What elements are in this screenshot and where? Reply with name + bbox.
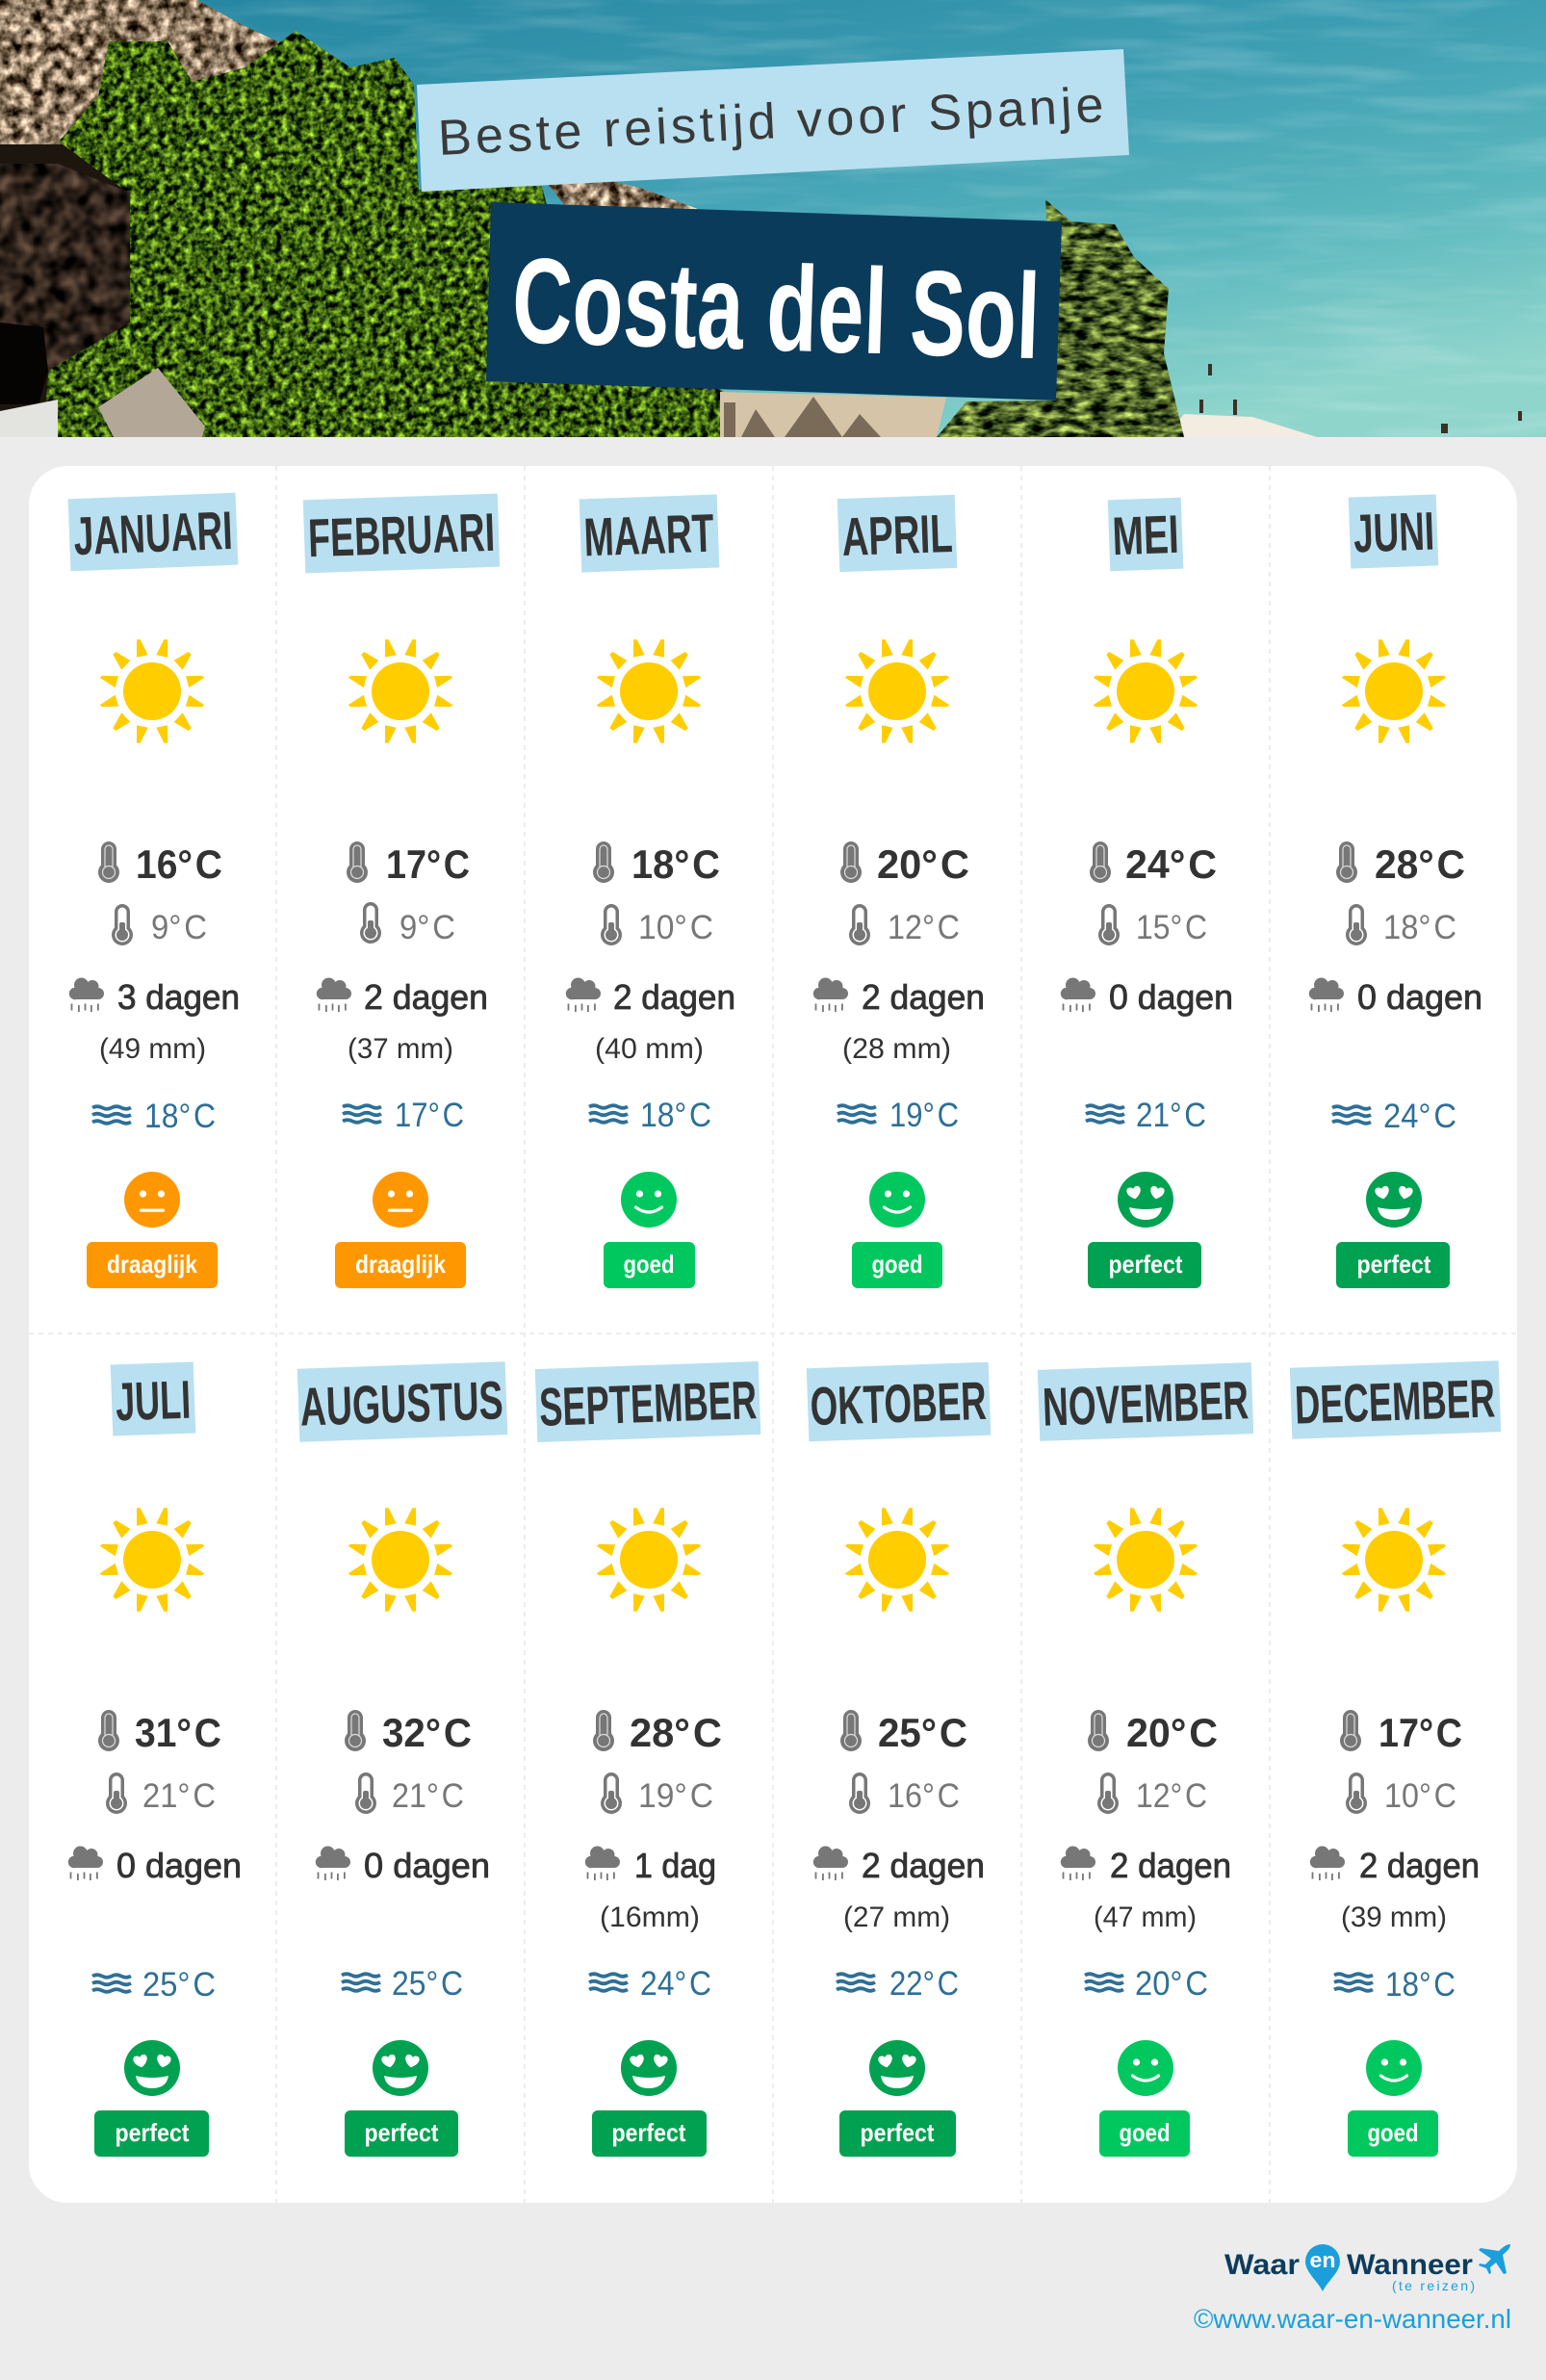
month label: FEBRUARI (307, 502, 496, 568)
panel: months table (29, 466, 1517, 2203)
logo: Waar en Wanneer: Wanneer (1347, 2249, 1473, 2281)
low temperature: 10°C (1384, 1777, 1456, 1815)
column: januari (68, 493, 240, 1288)
sea temperature (92, 1098, 216, 1135)
rating badge (94, 2110, 209, 2157)
sea temperature (1086, 1097, 1206, 1134)
month label: AUGUSTUS (299, 1369, 504, 1437)
rainfall: (40 mm) (595, 1033, 704, 1065)
high temperature: 32°C (382, 1710, 472, 1755)
low temperature (601, 1772, 713, 1815)
high temperature (98, 841, 222, 887)
month label (807, 1362, 991, 1441)
sea temperature: 24°C (640, 1965, 711, 2003)
month label: APRIL (840, 503, 954, 567)
low temperature (601, 904, 713, 946)
month label (297, 1361, 507, 1442)
rainfall: (28 mm) (842, 1033, 951, 1065)
icon: in-love face (124, 2040, 180, 2096)
logo: Waar en Wanneer (1224, 2244, 1510, 2293)
low temperature: 10°C (638, 909, 713, 946)
logo: Waar en Wanneer: (te reizen) (1392, 2278, 1475, 2293)
logo: Waar en Wanneer: Waar (1224, 2249, 1300, 2281)
high temperature (1336, 841, 1465, 887)
sea temperature: 19°C (889, 1097, 959, 1134)
rating badge (1088, 1242, 1201, 1288)
rainfall: (27 mm) (843, 1901, 950, 1933)
month label: NOVEMBER (1042, 1369, 1250, 1437)
sea temperature: 25°C (392, 1965, 463, 2003)
icon: sun (100, 1508, 204, 1612)
month label (580, 495, 719, 572)
month label (1349, 494, 1438, 569)
column: oktober (807, 1362, 991, 2157)
high temperature: 31°C (135, 1710, 221, 1755)
rainfall: (47 mm) (1094, 1901, 1197, 1933)
low temperature: 15°C (1136, 909, 1207, 946)
sea temperature (92, 1966, 216, 2004)
sea temperature: 17°C (395, 1097, 464, 1134)
rating badge (1336, 1242, 1450, 1288)
icon: sun (1094, 639, 1198, 743)
rating badge: goed (872, 1250, 922, 1279)
low temperature (849, 1772, 960, 1815)
icon: happy face (621, 1172, 677, 1228)
high temperature (98, 1710, 221, 1755)
month label (1108, 498, 1183, 571)
month label: SEPTEMBER (538, 1369, 758, 1437)
month label (68, 493, 238, 571)
rating badge: draaglijk (355, 1250, 446, 1279)
rating badge: perfect (1109, 1250, 1183, 1279)
high temperature (840, 1710, 967, 1755)
rating badge: goed (1119, 2118, 1171, 2147)
high temperature: 18°C (631, 841, 720, 887)
icon: happy face (1118, 2040, 1173, 2096)
low temperature: 12°C (888, 909, 960, 946)
sea temperature (1334, 1966, 1456, 2004)
sea temperature (589, 1965, 711, 2003)
column: december (1290, 1360, 1501, 2157)
column: februari (303, 494, 500, 1288)
icon: in-love face (621, 2040, 677, 2096)
column: april (813, 495, 985, 1288)
icon: sun (1342, 639, 1446, 743)
icon: neutral face (124, 1172, 180, 1228)
icon: sun (845, 1508, 949, 1612)
low temperature (1346, 904, 1456, 946)
rain days: 0 dagen (116, 1846, 242, 1885)
month label: JUNI (1353, 501, 1435, 563)
rain days: 2 dagen (1359, 1846, 1480, 1885)
rating badge (839, 2110, 956, 2157)
column: juni (1309, 494, 1482, 1288)
high temperature: 25°C (878, 1710, 967, 1755)
rainfall: (49 mm) (99, 1033, 206, 1065)
rating badge: perfect (1357, 1250, 1431, 1279)
low temperature (1346, 1772, 1456, 1815)
low temperature (112, 904, 207, 946)
high temperature: 20°C (877, 841, 969, 887)
sea temperature (343, 1097, 464, 1134)
sea temperature: 21°C (1136, 1097, 1206, 1134)
high temperature: 16°C (136, 841, 222, 887)
icon: airplane (1479, 2244, 1510, 2274)
rating badge: draaglijk (107, 1250, 197, 1279)
rainfall: (16mm) (600, 1901, 700, 1933)
low temperature: 9°C (399, 909, 455, 946)
low temperature: 18°C (1383, 909, 1456, 946)
icon: sun (100, 639, 204, 743)
rating badge: perfect (116, 2118, 190, 2147)
sea temperature: 20°C (1135, 1965, 1208, 2003)
sea temperature: 18°C (1385, 1966, 1456, 2004)
rating badge (1099, 2110, 1190, 2157)
rating badge: perfect (364, 2118, 439, 2147)
icon: sun (1342, 1508, 1446, 1612)
high temperature (345, 1710, 472, 1755)
month label: OKTOBER (810, 1370, 988, 1436)
month label (111, 1362, 195, 1436)
month label (303, 494, 500, 573)
high temperature (1340, 1710, 1462, 1755)
month label: MAART (582, 503, 715, 567)
low temperature: 12°C (1136, 1777, 1207, 1815)
high temperature: 17°C (386, 841, 470, 887)
sea temperature: 18°C (640, 1097, 711, 1134)
sea temperature: 25°C (142, 1966, 216, 2004)
month label: MEI (1111, 504, 1180, 566)
low temperature (849, 904, 960, 946)
month label (1038, 1362, 1253, 1441)
rating badge: goed (624, 1250, 674, 1279)
high temperature: 28°C (1375, 841, 1465, 887)
rain days (1310, 1846, 1480, 1885)
rating badge: perfect (612, 2118, 686, 2147)
rating badge (87, 1242, 218, 1288)
low temperature: 16°C (888, 1777, 960, 1815)
sea temperature (1332, 1098, 1456, 1135)
rain days: 3 dagen (117, 977, 240, 1017)
low temperature: 21°C (392, 1777, 464, 1815)
high temperature (593, 841, 720, 887)
icon: sun (597, 639, 701, 743)
high temperature (347, 841, 470, 887)
icon: in-love face (869, 2040, 925, 2096)
rain days: 2 dagen (1110, 1846, 1231, 1885)
rating badge: perfect (861, 2118, 935, 2147)
column: september (535, 1361, 760, 2157)
rainfall: (37 mm) (348, 1033, 453, 1065)
icon: sun (597, 1508, 701, 1612)
column: juli (68, 1362, 242, 2157)
month label: JULI (115, 1369, 192, 1432)
column: augustus (297, 1361, 507, 2157)
rain days: 2 dagen (364, 977, 488, 1017)
sea temperature (1085, 1965, 1208, 2003)
icon: map pin: en (1309, 2248, 1336, 2272)
rainfall: (39 mm) (1341, 1901, 1447, 1933)
high temperature: 24°C (1125, 841, 1217, 887)
column: mei (1061, 498, 1233, 1288)
month label: JANUARI (72, 500, 234, 566)
icon: map pin (1305, 2244, 1340, 2291)
icon: neutral face (373, 1172, 428, 1228)
icon: sun (845, 639, 949, 743)
header photo: coastline with sea, cliffs, foliage and beach (0, 0, 1546, 437)
sea temperature: 18°C (144, 1098, 216, 1135)
low temperature (106, 1772, 216, 1815)
rating badge (852, 1242, 942, 1288)
icon: in-love face (1118, 1172, 1173, 1228)
website url: ©www.waar-en-wanneer.nl (1194, 2304, 1511, 2334)
column: november (1038, 1362, 1253, 2157)
rain days (585, 1846, 716, 1885)
high temperature: 17°C (1379, 1710, 1462, 1755)
month label (535, 1361, 760, 1442)
icon: sun (348, 639, 452, 743)
rating badge: goed (1367, 2118, 1419, 2147)
rain days: 0 dagen (1109, 977, 1233, 1017)
rating badge (592, 2110, 707, 2157)
rain days: 2 dagen (862, 977, 985, 1017)
high temperature: 20°C (1126, 1710, 1218, 1755)
icon: in-love face (373, 2040, 428, 2096)
rain days: 2 dagen (613, 977, 735, 1017)
sea temperature (342, 1965, 463, 2003)
rain days: 0 dagen (1357, 977, 1482, 1017)
low temperature: 21°C (142, 1777, 216, 1815)
subtitle banner: Beste reistijd voor Spanje (437, 77, 1105, 167)
rain days: 0 dagen (364, 1846, 490, 1885)
sea temperature (837, 1965, 959, 2003)
month label (837, 495, 957, 572)
title banner: Costa del Sol (510, 232, 1042, 384)
rating badge (604, 1242, 695, 1288)
low temperature (1097, 1772, 1207, 1815)
rain days (1061, 1846, 1231, 1885)
column: maart (566, 495, 735, 1288)
high temperature: 28°C (630, 1710, 722, 1755)
subtitle banner (417, 49, 1129, 192)
low temperature (360, 902, 455, 946)
sea temperature (589, 1097, 711, 1134)
sea temperature (837, 1097, 959, 1134)
rain days: 2 dagen (862, 1846, 985, 1885)
rating badge (1348, 2110, 1438, 2157)
sea temperature: 24°C (1383, 1098, 1456, 1135)
title banner (486, 202, 1062, 401)
icon: sun (348, 1508, 452, 1612)
icon: happy face (1366, 2040, 1422, 2096)
sea temperature: 22°C (889, 1965, 959, 2003)
low temperature: 9°C (151, 909, 207, 946)
icon: in-love face (1366, 1172, 1422, 1228)
rating badge (335, 1242, 466, 1288)
icon: happy face (869, 1172, 925, 1228)
low temperature: 19°C (638, 1777, 713, 1815)
low temperature (1098, 904, 1207, 946)
low temperature (355, 1772, 464, 1815)
icon: sun (1094, 1508, 1198, 1612)
rating badge (345, 2110, 458, 2157)
rain days: 1 dag (634, 1846, 716, 1885)
